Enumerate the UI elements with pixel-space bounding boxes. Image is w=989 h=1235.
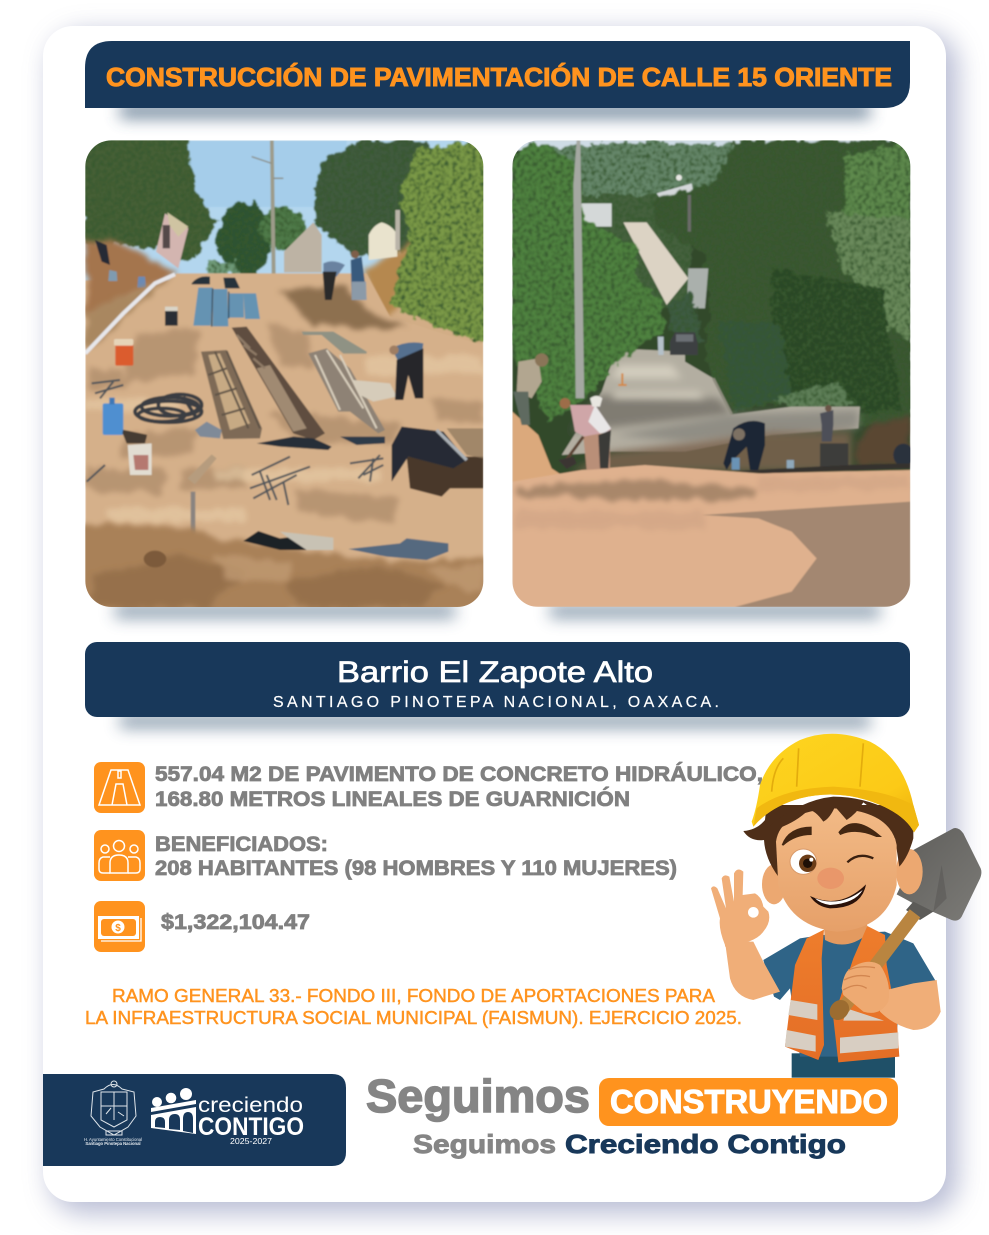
- photo: workers laying forms on a dirt street: [73, 135, 487, 612]
- head: [776, 808, 897, 932]
- slogan line two: [413, 1129, 846, 1159]
- safety vest: [785, 926, 899, 1062]
- white curb line: [85, 274, 175, 353]
- shadow on ground: [702, 502, 910, 607]
- mascot: construction worker boy: [711, 734, 981, 1078]
- Creciendo Contigo logo: creciendo: [198, 1094, 303, 1117]
- house: [156, 213, 188, 268]
- left trees: [73, 135, 217, 263]
- orange cooler: [115, 343, 133, 366]
- slogan: Seguimos: Seguimos: [366, 1070, 590, 1122]
- dirt bank: [362, 240, 412, 316]
- rebar on ground: [87, 380, 383, 505]
- Creciendo Contigo logo: 2025-2027: [230, 1137, 273, 1146]
- rod and foreground mound: [191, 492, 195, 535]
- text: beneficiaries: BENEFICIADOS:: [155, 833, 328, 856]
- blue sheet forms: [193, 288, 260, 326]
- two workers far: [323, 250, 367, 300]
- hair fringe: [767, 797, 908, 840]
- slogan line two: Seguimos: [413, 1129, 556, 1159]
- trench dark shadow: [572, 432, 852, 472]
- worker with shovel: [558, 398, 611, 470]
- neighborhood name: Barrio El Zapote Alto: [337, 656, 653, 689]
- pants: [792, 1053, 895, 1078]
- metal forms: [201, 350, 262, 439]
- funding note: [85, 986, 742, 1028]
- nose: [817, 868, 844, 889]
- blue water jug: [103, 403, 123, 435]
- council caption: Santiago Pinotepa Nacional: [85, 1141, 141, 1146]
- text: beneficiaries: 208 HABITANTES (98 HOMBRES Y 110 MUJERES): [155, 857, 677, 880]
- ground: [512, 465, 910, 607]
- distant objects: [192, 276, 240, 288]
- council caption: H. Ayuntamiento Constitucional: [84, 1137, 142, 1142]
- city: SANTIAGO PINOTEPA NACIONAL, OAXACA.: [273, 694, 719, 711]
- utility pole: [270, 140, 276, 275]
- funding note: LA INFRAESTRUCTURA SOCIAL MUNICIPAL (FAISMUN). EJERCICIO 2025.: [85, 1008, 742, 1028]
- poles: [573, 140, 584, 398]
- icon: banknote: [94, 901, 145, 952]
- location banner: [85, 642, 910, 728]
- photo shadows: [115, 604, 880, 618]
- eyebrows: [782, 827, 812, 846]
- person in white hat: [590, 396, 602, 407]
- icon: road: [94, 762, 145, 813]
- Creciendo Contigo logo: CONTIGO: [198, 1113, 304, 1141]
- text: pavement quantities: [155, 763, 763, 811]
- smile: [810, 884, 866, 908]
- neck: [823, 922, 868, 945]
- worker bending right: [389, 342, 423, 400]
- bottle: [787, 460, 794, 468]
- text: beneficiaries: [155, 833, 677, 880]
- council caption: [84, 1137, 142, 1146]
- shirt: [763, 932, 936, 1057]
- handle end: [826, 996, 853, 1024]
- icon: people: [94, 830, 145, 881]
- ears: [762, 864, 786, 904]
- forearm and gripping hand: [842, 962, 941, 1030]
- winking eye: [847, 856, 873, 862]
- worker far left: [513, 353, 548, 425]
- embankment right: [855, 415, 910, 465]
- shovel blade: [897, 828, 981, 921]
- traffic cone: [618, 373, 627, 385]
- car: [670, 332, 698, 355]
- slogan badge: construyendo: CONSTRUYENDO: [610, 1083, 888, 1120]
- hair back: [743, 805, 913, 877]
- slogan line two: Creciendo Contigo: [565, 1129, 846, 1159]
- icon: banknote: $: [115, 923, 121, 934]
- water tank: [369, 222, 397, 260]
- left embankment: [85, 240, 177, 317]
- bucket black: [165, 311, 178, 326]
- ground: [169, 272, 476, 344]
- Creciendo Contigo logo: [151, 1088, 304, 1146]
- house behind trees: [687, 268, 708, 308]
- open eye: [790, 849, 817, 874]
- tarp pieces: [257, 437, 332, 450]
- tarp pieces in foreground: [243, 531, 307, 550]
- worker crouching: [723, 421, 765, 470]
- curb: [713, 378, 732, 414]
- hard hat: [752, 734, 919, 832]
- right dark trees: [655, 140, 912, 428]
- title text: CONSTRUCCIÓN DE PAVIMENTACIÓN DE CALLE 15 ORIENTE: [106, 62, 892, 92]
- road in the middle: [562, 348, 860, 455]
- logo panel: [43, 1074, 346, 1166]
- photo: street works with lush trees: [512, 140, 913, 607]
- funding note: RAMO GENERAL 33.- FONDO III, FONDO DE APORTACIONES PARA: [112, 986, 715, 1006]
- concrete block: [187, 454, 217, 484]
- shovel handle: [842, 913, 915, 1010]
- left trees: [512, 140, 665, 422]
- text: pavement quantities: 557.04 M2 DE PAVIMENTO DE CONCRETO HIDRÁULICO,: [155, 763, 763, 786]
- paint bucket: [128, 443, 152, 475]
- text: amount: $1,322,104.47: [161, 911, 310, 934]
- text: pavement quantities: 168.80 METROS LINEALES DE GUARNICIÓN: [155, 787, 630, 811]
- right trees: [313, 140, 427, 258]
- title banner: [85, 41, 910, 118]
- pile of tools: [195, 422, 222, 438]
- raised arm and OK hand: [711, 870, 780, 1000]
- center trees and wall: [218, 202, 272, 274]
- hills: [535, 142, 738, 198]
- reflective stripes: [785, 1000, 898, 1053]
- coil of hose: [135, 394, 202, 422]
- distant buildings: [580, 202, 613, 228]
- distant standing worker: [820, 405, 833, 442]
- crest: [91, 1081, 136, 1135]
- mid-distance greens: [578, 195, 692, 308]
- far road: [623, 222, 688, 305]
- wheelbarrow with black tarp: [407, 457, 483, 497]
- sheet on ground: [302, 332, 367, 354]
- left mound: [512, 412, 572, 482]
